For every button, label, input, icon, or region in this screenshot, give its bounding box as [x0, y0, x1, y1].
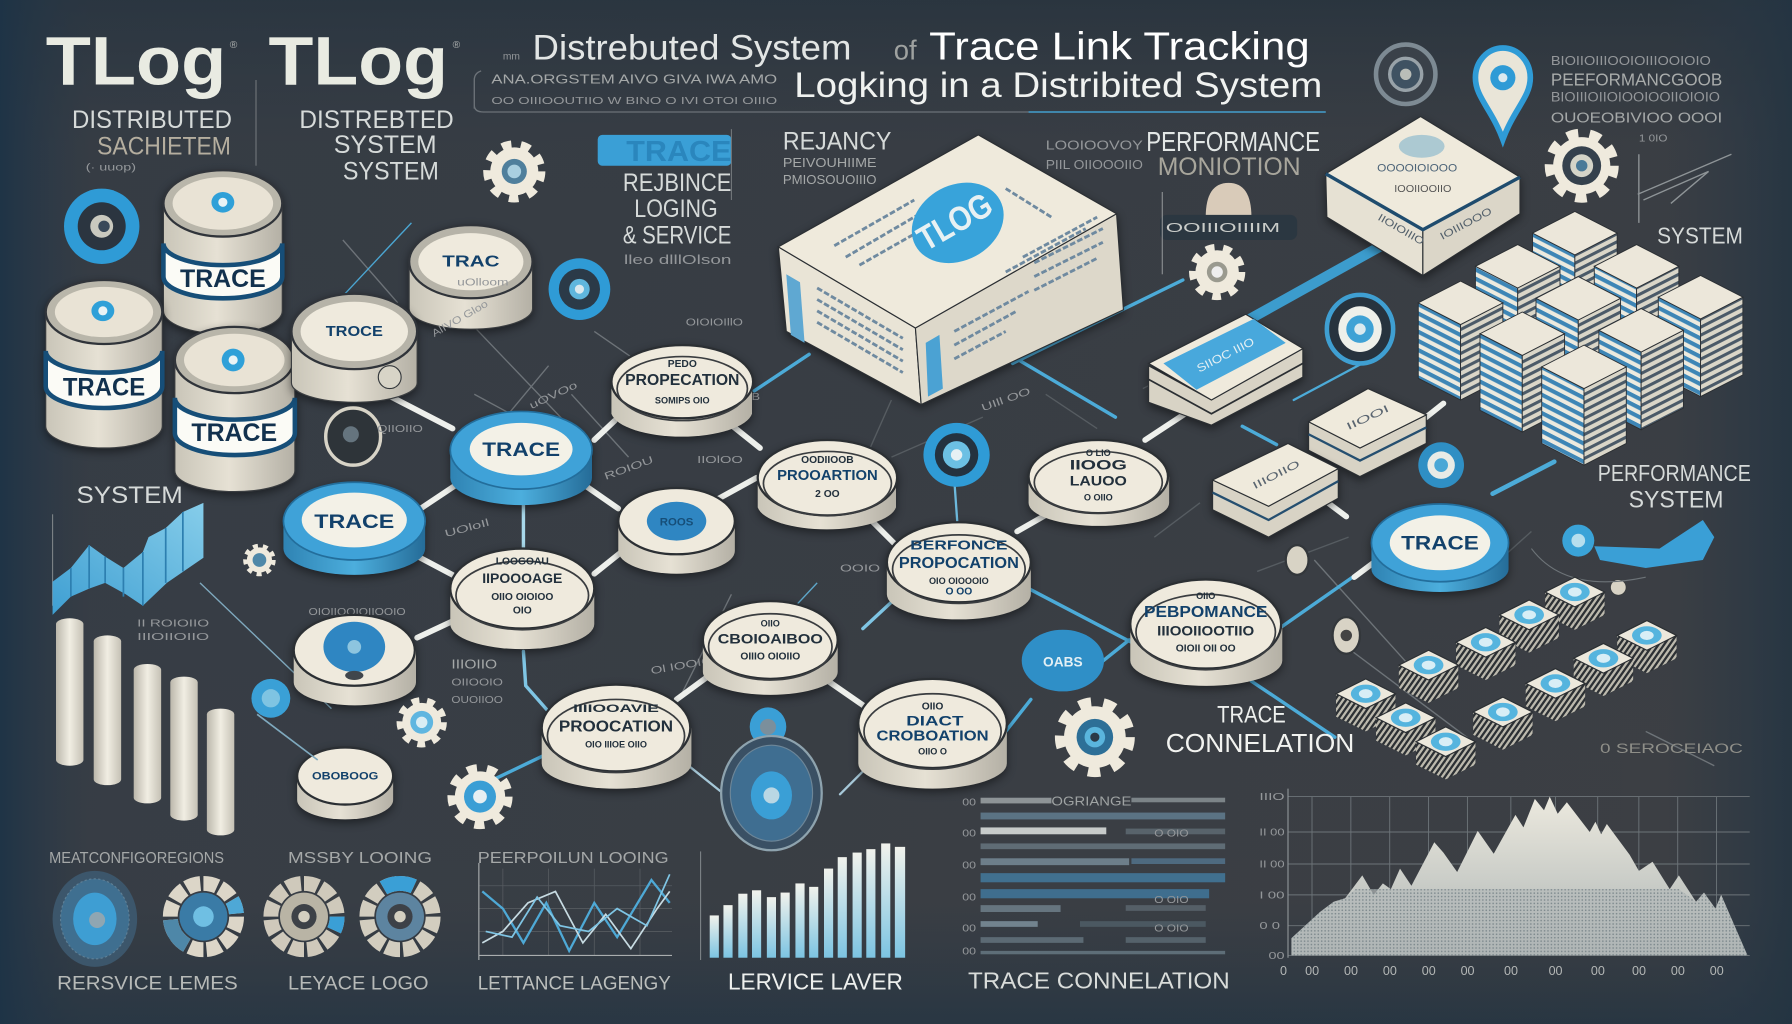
node: LOGGING: IIOOG: [1070, 458, 1127, 473]
main title panel: OO OIIIOOUTIIO W BINO O IVI OTOI OIIIO: [491, 96, 777, 107]
performance monitoring label: LOOIOOVOY: [1046, 139, 1144, 153]
node: BERFORMANCE PROPOCATION: [887, 522, 1031, 619]
chart: mountain area chart: 00: [1591, 964, 1605, 978]
stack: book 3: [1213, 443, 1338, 537]
label: TRACE CONNELATION: [1166, 701, 1354, 758]
header: TLog logos: DISTRIBUTED: [72, 106, 232, 134]
top center: trace label block: REJBINCE: [623, 169, 731, 197]
cylinder: TRACE 2: TRACE: [63, 373, 145, 401]
redundancy label: [783, 128, 892, 187]
icon: gear lower left: [400, 701, 443, 744]
node: LOGGING: [1029, 440, 1169, 526]
isometric box 2: IIOIOIIIO: [1376, 213, 1426, 248]
label: SYSTEM left: SYSTEM: [77, 482, 183, 509]
small notes: center left: Ol.OB: [726, 392, 760, 403]
small notes: center left: OIOIIOOIOIIOOIO: [309, 607, 406, 618]
top right notes: BIOIIOIIIOOIOIIIOOIOIO: [1551, 54, 1711, 68]
performance monitoring label: MONIOTION: [1158, 153, 1301, 181]
chart: mountain area chart: 0: [1280, 964, 1287, 978]
top center: trace label block: & SERVICE: [623, 221, 731, 249]
icon: gear bottom: [452, 768, 508, 825]
table: trace correlation rows: 00: [962, 946, 976, 957]
main title panel: ANA.ORGSTEM AIVO GIVA IWA AMO: [491, 72, 777, 86]
isometric box 2: IOOIIOOIIO: [1394, 184, 1451, 195]
table: trace correlation rows: 00: [962, 798, 976, 809]
small notes: center left: OIOIOIllO: [686, 318, 743, 329]
node: PROBATION: OODIIOOB: [801, 455, 854, 466]
icon: blue medallion: [750, 707, 786, 746]
small notes: center left: OUOIIOO: [451, 695, 503, 706]
stack: book 3: IIIOIIO: [1251, 459, 1302, 492]
node: LOGGING: O OIIO: [1084, 493, 1113, 503]
chart: mountain area chart: 00: [1549, 964, 1563, 978]
top right notes: BIOIIIOIIOIOOIOOIIOIOIO: [1551, 90, 1720, 105]
stack: blue book: SIIOC IIIO: [1195, 336, 1257, 375]
chart: mountain area chart: 00: [1632, 964, 1646, 978]
node: PROPOCATION bottom: IIIIOOAVIE: [573, 703, 659, 715]
bottom labels: LERVICE LAVER: [728, 969, 903, 995]
main title panel: of: [894, 34, 917, 65]
node: PROPOCATION bottom: [542, 685, 691, 789]
table: trace correlation rows: O OIO: [1154, 895, 1189, 906]
icon: location pin: [1475, 48, 1530, 139]
bottom labels: [57, 968, 1230, 995]
node: BERFORMANCE PROPOCATION: PROPOCATION: [899, 555, 1019, 572]
can: TROCE: TROCE: [326, 324, 383, 340]
node: blue core: [618, 488, 735, 574]
label: TRACE CONNELATION: TRACE: [1217, 701, 1286, 728]
table: trace correlation rows: OGRIANGE: [1051, 795, 1131, 809]
main title panel: Distrebuted System: [533, 27, 851, 67]
node: PROPAGATION: [611, 345, 753, 437]
small notes: center left: AlIVO Gloo: [430, 299, 491, 340]
cylinder: TRACE 3: TRACE: [191, 419, 277, 447]
table: trace correlation rows: O OIO: [1154, 829, 1189, 840]
node: center small: [703, 601, 838, 695]
can: TROCE: [291, 294, 417, 402]
icon: blue ring center: [923, 423, 990, 487]
node: TRACE blue right: TRACE: [1401, 533, 1479, 555]
table: trace correlation rows: 00: [962, 861, 976, 872]
table: trace correlation rows: 00: [962, 829, 976, 840]
node: TRACE blue left: [283, 482, 425, 575]
label: TRACE CONNELATION: CONNELATION: [1166, 728, 1354, 758]
node: DIACT CROBOATION: DIACT: [906, 714, 964, 729]
bottom header labels: MEATCONFIGOREGIONS: [49, 850, 224, 867]
chart: mountain area chart: 00: [1710, 964, 1724, 978]
small notes: center left: OOIO: [840, 563, 880, 574]
main title panel: Logking in a Distribited System: [794, 65, 1322, 105]
stack: book 2: [1309, 389, 1426, 477]
connector arrows: [386, 247, 1554, 794]
big box: TLog: [778, 135, 1123, 405]
chart: mountain area chart: 0 0: [1259, 921, 1280, 932]
icon: gear center bottom: [1060, 703, 1129, 772]
node: BERFORMANCE PROPOCATION: BERFONCE: [910, 539, 1007, 553]
chart: latency line chart: [479, 863, 672, 960]
node: PROBATION: PROOARTION: [777, 468, 878, 484]
chart: mountain area chart: I 00: [1259, 890, 1285, 901]
stack: blue book: [1149, 314, 1303, 425]
small notes: center left: II ROIOIIO: [137, 618, 209, 629]
chart: mountain area chart: 00: [1422, 964, 1436, 978]
mini line sketch: [1638, 134, 1731, 223]
chart: mountain area chart: 00: [1671, 964, 1685, 978]
main title panel: mm: [503, 51, 520, 62]
chart: mountain area chart: 00: [1383, 964, 1397, 978]
small notes: center left: uOlloom: [457, 278, 509, 289]
small notes: center left: IIIOIIOIIO: [137, 632, 209, 643]
header: TLog logos: SYSTEM: [343, 157, 439, 185]
small notes: center left: IIOlOO: [697, 455, 743, 466]
chart: service layer bars: [701, 843, 905, 960]
table: trace correlation rows: [962, 795, 1225, 957]
chart: mountain area chart: [1259, 789, 1750, 978]
node: DIACT CROBOATION: OIIO: [922, 702, 943, 713]
icon: blue ring mid right: [1327, 295, 1393, 363]
bottom header labels: PEERPOILUN LOOING: [478, 850, 669, 867]
can: TRAC: [409, 225, 533, 329]
small notes: center left: uOVOo: [528, 380, 580, 412]
icon: small gear left: [245, 546, 274, 574]
small notes: center left: UIll OO: [980, 386, 1032, 414]
main title panel: [474, 25, 1326, 112]
dial: textured blue: [53, 871, 137, 967]
icon: gear right: [1550, 134, 1614, 198]
table: trace correlation rows: 00: [962, 923, 976, 934]
bottom labels: LEYACE LOGO: [288, 973, 429, 995]
monitoring gadget: [1160, 183, 1297, 274]
chart: rising blue ribbon: [53, 503, 203, 615]
icon: small ring right: [1418, 442, 1464, 488]
label: PERFORMANCE SYSTEM: PERFORMANCE: [1598, 460, 1751, 486]
node: small bottom left: [297, 747, 393, 819]
top center: trace label block: [598, 129, 731, 267]
can: TRAC: TRAC: [442, 253, 500, 270]
node: PROPAGATION: SOMIPS OIO: [655, 395, 710, 405]
chart: mountain area chart: 00: [1344, 964, 1358, 978]
mini line sketch: 1 0IO: [1639, 134, 1667, 145]
dial: segmented ring 1: [170, 883, 237, 950]
main title panel: Trace Link Tracking: [929, 25, 1310, 68]
node: LOGGING PROPAGE: OIIO OIOIOO: [491, 592, 553, 603]
icon: blue ring center left: [549, 258, 610, 320]
top right notes: OUOEOBIVIOO OOOI: [1551, 110, 1722, 126]
monitoring gadget: OOIIIOIIIIM: [1166, 221, 1280, 235]
cylinder: TRACE 1: [163, 170, 282, 334]
redundancy label: REJANCY: [783, 128, 892, 156]
server towers cluster: [1418, 211, 1743, 465]
small notes: center left: Ol IOOIO: [650, 655, 714, 677]
header: TLog logos: ®: [453, 40, 461, 51]
node: DIACT CROBOATION: OIIO O: [918, 746, 947, 756]
isometric box 2: OOOOIOIOOO: [1377, 162, 1457, 174]
node: BERFORMANCE PROPOCATION: O OO: [945, 586, 972, 597]
top right notes: [1551, 54, 1722, 126]
performance monitoring label: PERFORMANCE: [1146, 126, 1320, 157]
node: blue disc: [1022, 630, 1104, 691]
icon: dark sphere: [326, 408, 381, 465]
top right notes: PEEFORMANCGOOB: [1551, 70, 1722, 90]
cylinder: TRACE 2: [46, 280, 162, 448]
chart: mountain area chart: II 00: [1259, 827, 1285, 838]
chart: mountain area chart: II 00: [1259, 859, 1285, 870]
small notes: center left: [137, 278, 1032, 706]
node: PROPOCATION bottom: PROOCATION: [559, 718, 673, 735]
node: PROBATION: 2 OO: [815, 489, 840, 500]
icon: gear top: [487, 145, 541, 198]
node: PERFORMANCE: IIIOOIIOOTIIO: [1157, 623, 1255, 638]
note: lower right: 0 SEROCEIAOC: [1600, 741, 1743, 756]
bottom labels: RERSVICE LEMES: [57, 973, 238, 995]
top center: trace label block: LOGING: [634, 195, 718, 223]
table: trace correlation rows: 00: [962, 893, 976, 904]
header: TLog logos: ®: [230, 40, 238, 51]
node: LOGGING PROPAGE: OIO: [513, 606, 532, 617]
dial: segmented ring 2: [271, 883, 337, 950]
icon: blue ring top left: [64, 189, 139, 264]
node: PROPAGATION: PROPECATION: [625, 372, 739, 389]
chart: mountain area chart: 00: [1461, 964, 1475, 978]
node: LOGGING PROPAGE: LOOGOAU: [496, 557, 549, 568]
big box: TLog: TLOG: [911, 186, 999, 259]
node: blue core: ROOS: [660, 517, 694, 529]
performance monitoring label: PIIL OIIOOOIIO: [1046, 158, 1143, 172]
node: PERFORMANCE: PEBPOMANCE: [1144, 604, 1268, 621]
bottom header labels: MSSBY LOOING: [288, 850, 432, 867]
node: TRACE blue: [450, 411, 592, 505]
node: LOGGING PROPAGE: [450, 549, 594, 649]
node: TRACE blue left: TRACE: [314, 511, 394, 533]
header: TLog logos: (· uuop): [86, 162, 136, 173]
chart: mountain area chart: 00: [1305, 964, 1319, 978]
top center: trace label block: TRACE: [626, 136, 731, 168]
node: blue core lower left: [294, 615, 416, 705]
node: TRACE blue right: [1371, 504, 1509, 592]
small notes: center left: ROIOU: [603, 455, 655, 483]
node: TRACE blue: TRACE: [482, 439, 560, 461]
header: TLog logos: TLog: [46, 23, 226, 100]
node: PROPAGATION: PEDO: [668, 359, 697, 370]
small notes: center left: QIIOIIO: [377, 424, 423, 435]
node: PERFORMANCE: OIOII OII OO: [1176, 643, 1236, 654]
stack: book 2: IIOOI: [1345, 404, 1391, 433]
chart: mountain area chart: 00: [1269, 951, 1285, 962]
node: PERFORMANCE: [1130, 579, 1282, 686]
isometric box 2: [1326, 117, 1520, 275]
node: PERFORMANCE: OIIO: [1196, 591, 1215, 601]
header: TLog logos: TLog: [269, 23, 448, 100]
node: LOGGING: LAUOO: [1070, 474, 1127, 489]
icon: gear center top: [1193, 248, 1241, 296]
node: LOGGING PROPAGE: IIPOOOAGE: [482, 571, 562, 586]
node: PROPOCATION bottom: OIO IIIOE OIIO: [585, 739, 647, 749]
bottom header labels: [49, 850, 669, 867]
label: PERFORMANCE SYSTEM: SYSTEM: [1629, 486, 1723, 513]
label: PERFORMANCE SYSTEM: [1598, 460, 1751, 513]
node: center small: CBOIOAIBOO: [718, 631, 823, 646]
cylinder: TRACE 3: [175, 327, 295, 492]
icon: small blue badge: [251, 679, 318, 760]
node: blue disc: OABS: [1043, 654, 1083, 669]
node: DIACT CROBOATION: [858, 679, 1007, 789]
node: center small: OIIO: [761, 618, 780, 628]
cylinder: TRACE 1: TRACE: [180, 265, 266, 293]
redundancy label: PEIVOUHIIME: [783, 156, 877, 170]
node: small bottom left: OBOBOOG: [312, 770, 378, 782]
bottom labels: LETTANCE LAGENGY: [478, 973, 671, 995]
small notes: center left: OIIOOIO: [451, 678, 503, 689]
label: SYSTEM right: SYSTEM: [1657, 222, 1743, 248]
performance monitoring label: [1046, 126, 1320, 181]
background thin connector lines: [200, 223, 1714, 777]
redundancy label: PMIOSOUOIIIO: [783, 173, 877, 187]
icon: grey ring: [1376, 45, 1435, 104]
chart: mountain area chart: IIIO: [1259, 792, 1285, 803]
icon: large swirl ring: [721, 736, 822, 850]
node: PROBATION: [758, 440, 897, 529]
dial: segmented ring 3: [367, 883, 433, 950]
header: TLog logos: SACHIETEM: [97, 132, 231, 160]
small notes: center left: UOloIl: [444, 518, 491, 540]
node: BERFORMANCE PROPOCATION: OIO OIOOOIO: [929, 576, 989, 586]
top center: trace label block: lleo dlllOlson: [624, 253, 731, 267]
node: DIACT CROBOATION: CROBOATION: [877, 729, 989, 745]
bottom labels: TRACE CONNELATION: [968, 968, 1230, 994]
header: TLog logos: DISTREBTED: [299, 106, 454, 134]
node: center small: OIIIO OIOIIO: [740, 651, 800, 662]
header: TLog logos: [46, 23, 461, 185]
icon: blue ribbon with badge: [1531, 520, 1714, 595]
table: trace correlation rows: O OIO: [1154, 923, 1189, 934]
isometric box 2: IOIIIOOO: [1439, 206, 1494, 243]
header: TLog logos: SYSTEM: [334, 131, 437, 159]
node: LOGGING: O LIO: [1086, 448, 1111, 458]
chart: white column bars: [56, 618, 234, 835]
chart: mountain area chart: 00: [1504, 964, 1518, 978]
small notes: center left: IIIOIIO: [451, 658, 497, 672]
small isometric cube grid: [1336, 577, 1677, 779]
icon: small beige rings: [1286, 545, 1360, 654]
